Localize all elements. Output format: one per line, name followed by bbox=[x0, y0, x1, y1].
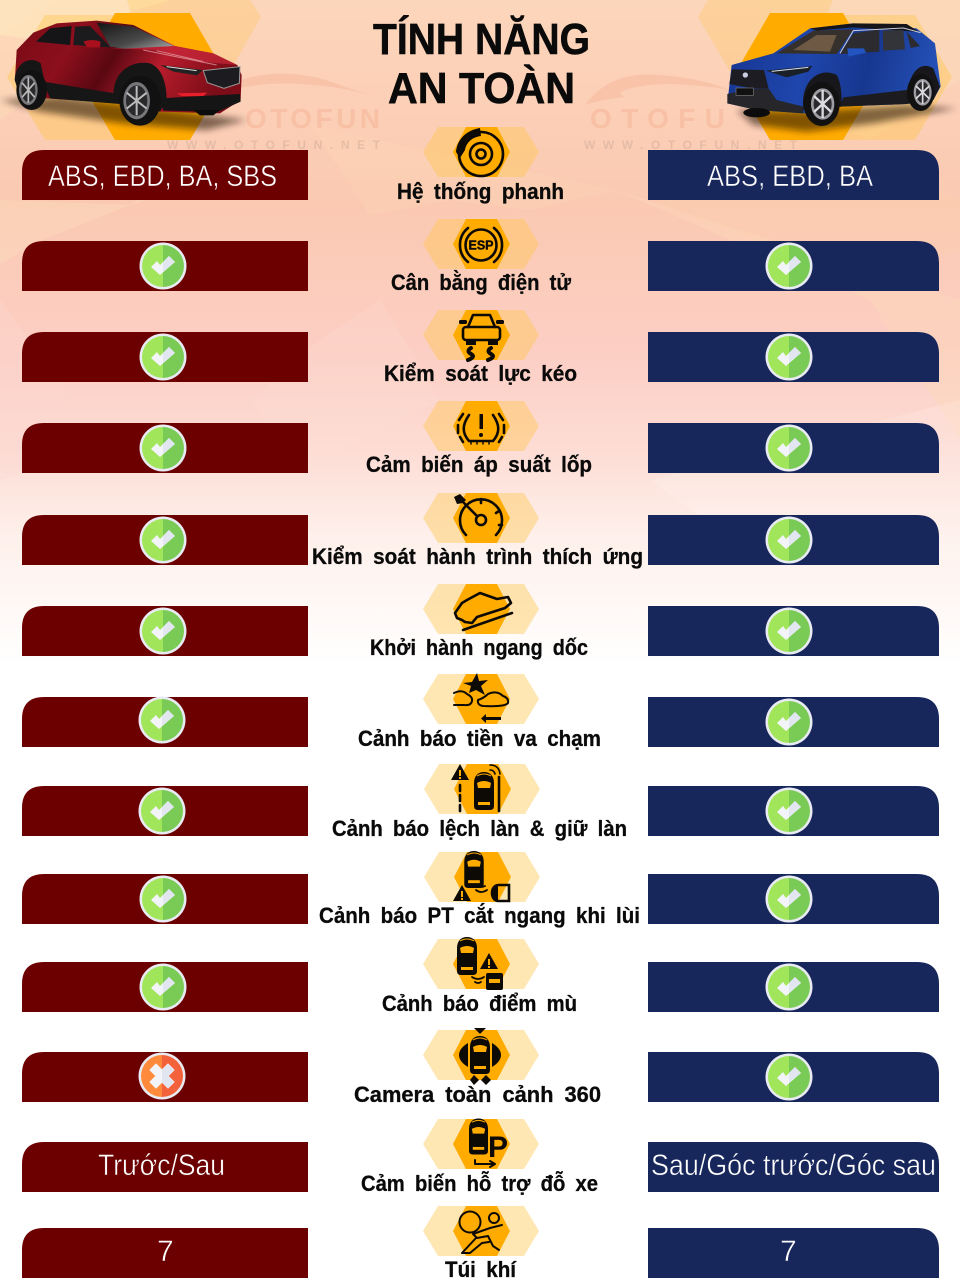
feature: Cảnh báo điểm mù: Cảnh báo điểm mù bbox=[382, 991, 577, 1016]
right value: cảm biến: Sau/Góc trước/Góc sau bbox=[651, 1149, 936, 1182]
left check: cân bằng điện tử bbox=[22, 241, 308, 291]
left value: túi khí bbox=[22, 1228, 308, 1278]
feature: Hệ thống phanh bbox=[397, 127, 564, 204]
right check: lệch làn bbox=[648, 786, 939, 836]
right check: khởi hành ngang dốc bbox=[648, 606, 939, 656]
right check: cắt ngang khi lùi bbox=[648, 874, 939, 924]
icon: blind spot bbox=[457, 937, 503, 990]
feature: Cảnh báo PT cắt ngang khi lùi: Cảnh báo PT cắt ngang khi lùi bbox=[319, 903, 640, 928]
feature: Cảnh báo lệch làn & giữ làn bbox=[332, 764, 627, 841]
feature: Cảnh báo PT cắt ngang khi lùi bbox=[319, 851, 640, 928]
left check: kiểm soát lực kéo bbox=[22, 332, 308, 382]
panel: right column, navy bars bbox=[648, 150, 939, 1278]
feature: Cân bằng điện tử: Cân bằng điện tử bbox=[391, 270, 571, 295]
left check: khởi hành ngang dốc bbox=[22, 606, 308, 656]
car: blue Toyota Corolla Cross bbox=[727, 23, 957, 132]
left value: phanh bbox=[22, 150, 308, 200]
right check: camera 360 bbox=[648, 1052, 939, 1102]
feature: Khởi hành ngang dốc bbox=[370, 584, 588, 660]
icon: collision warning bbox=[454, 673, 508, 723]
icon: parking sensor: P bbox=[488, 1131, 508, 1164]
feature: Hệ thống phanh: Hệ thống phanh bbox=[397, 179, 564, 204]
right check: điểm mù bbox=[648, 962, 939, 1012]
icon: airbag bbox=[460, 1212, 502, 1253]
title: AN TOÀN bbox=[388, 63, 575, 113]
left cross: camera 360 bbox=[22, 1052, 308, 1102]
icon: lane departure bbox=[451, 764, 500, 811]
feature: Cảm biến áp suất lốp: Cảm biến áp suất lốp bbox=[366, 452, 592, 477]
feature: Cảnh báo điểm mù bbox=[382, 937, 577, 1016]
right value: cảm biến bbox=[648, 1142, 939, 1192]
feature: Kiểm soát hành trình thích ứng bbox=[312, 493, 643, 569]
icon: tyre pressure bbox=[458, 414, 504, 444]
icon: parking sensor bbox=[469, 1118, 508, 1167]
left value: phanh: ABS, EBD, BA, SBS bbox=[48, 160, 277, 193]
watermark: OTOFUN left: OTOFUN bbox=[245, 103, 380, 134]
right value: phanh: ABS, EBD, BA bbox=[707, 160, 873, 193]
title: TÍNH NĂNG bbox=[373, 14, 590, 64]
left check: lệch làn bbox=[22, 786, 308, 836]
right value: túi khí bbox=[648, 1228, 939, 1278]
hexagons behind right car bbox=[698, 0, 952, 140]
feature: Kiểm soát lực kéo bbox=[384, 310, 577, 386]
left check: cắt ngang khi lùi bbox=[22, 874, 308, 924]
hexagons behind left car bbox=[7, 0, 261, 140]
right check: kiểm soát lực kéo bbox=[648, 332, 939, 382]
right value: túi khí: 7 bbox=[780, 1235, 797, 1268]
car: red Mazda CX-30 bbox=[0, 21, 247, 130]
watermark: OTOFUN right bbox=[584, 74, 798, 152]
right check: tiền va chạm bbox=[648, 697, 939, 747]
icon: 360 camera bbox=[459, 1028, 501, 1085]
left value: túi khí: 7 bbox=[157, 1235, 174, 1268]
feature: Khởi hành ngang dốc: Khởi hành ngang dốc bbox=[370, 635, 588, 660]
icon: hill start car bbox=[455, 593, 512, 630]
feature: Túi khí bbox=[423, 1206, 539, 1280]
feature: Camera toàn cảnh 360 bbox=[354, 1028, 601, 1107]
right check: cân bằng điện tử bbox=[648, 241, 939, 291]
feature: Cảnh báo tiền va chạm: Cảnh báo tiền va chạm bbox=[358, 726, 601, 751]
icon: brake disc bbox=[456, 128, 503, 176]
icon: rear cross traffic bbox=[453, 851, 509, 901]
watermark: OTOFUN left bbox=[167, 74, 381, 152]
feature: Cân bằng điện tử bbox=[391, 219, 571, 295]
watermark: OTOFUN left: WWW.OTOFUN.NET bbox=[167, 138, 381, 152]
right check: áp suất lốp bbox=[648, 423, 939, 473]
feature: Cảnh báo lệch làn & giữ làn: Cảnh báo lệch làn & giữ làn bbox=[332, 816, 627, 841]
icon: ESP: ESP bbox=[468, 238, 494, 252]
left check: tiền va chạm bbox=[22, 696, 308, 747]
left check: áp suất lốp bbox=[22, 423, 308, 473]
watermark: OTOFUN right: OTOFU bbox=[590, 103, 725, 134]
right check: hành trình thích ứng bbox=[648, 515, 939, 565]
feature: Camera toàn cảnh 360: Camera toàn cảnh 360 bbox=[354, 1082, 601, 1107]
right value: phanh bbox=[648, 150, 939, 200]
left value: cảm biến: Trước/Sau bbox=[98, 1149, 225, 1182]
watermark: OTOFUN right: WWW.OTOFUN.NET bbox=[584, 138, 798, 152]
panel: left column, red bars bbox=[22, 150, 308, 1278]
left value: cảm biến bbox=[22, 1142, 308, 1192]
icon: traction car bbox=[459, 315, 504, 360]
feature: Cảnh báo tiền va chạm bbox=[358, 673, 601, 751]
title bbox=[373, 14, 590, 113]
left check: điểm mù bbox=[22, 962, 308, 1012]
feature: Cảm biến áp suất lốp bbox=[366, 401, 592, 477]
icon: adaptive cruise bbox=[454, 494, 502, 535]
feature: Kiểm soát hành trình thích ứng: Kiểm soát hành trình thích ứng bbox=[312, 544, 643, 569]
feature: Cảm biến hỗ trợ đỗ xe: Cảm biến hỗ trợ đỗ xe bbox=[361, 1171, 598, 1196]
feature: Cảm biến hỗ trợ đỗ xe bbox=[361, 1118, 598, 1196]
icon: ESP bbox=[460, 228, 502, 262]
feature: Kiểm soát lực kéo: Kiểm soát lực kéo bbox=[384, 361, 577, 386]
left check: hành trình thích ứng bbox=[22, 515, 308, 565]
